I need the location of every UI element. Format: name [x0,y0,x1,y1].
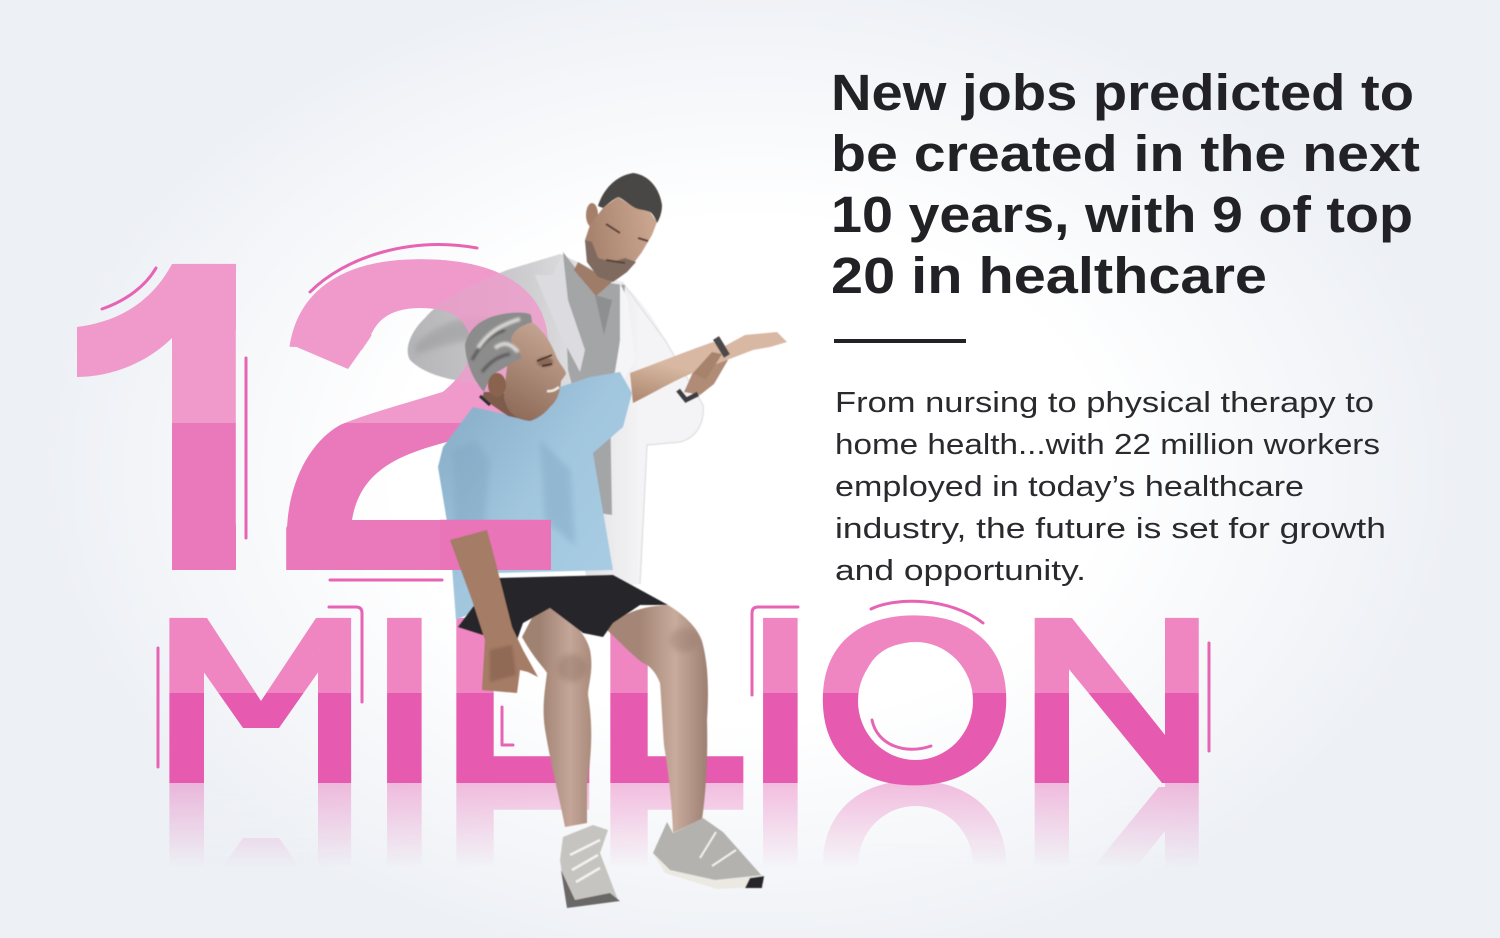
shoe body [560,825,618,907]
numeral 2 foot over shirt: 2 [267,167,576,665]
doctor: hand under arm [684,352,728,395]
doctor: beard [585,240,636,282]
patient: shirt shading [452,440,575,545]
divider under heading [834,339,966,343]
patient: eye shadow [537,357,553,367]
doctor: face [585,197,657,282]
patient torso [438,313,632,620]
big numerals: 12 [77,259,504,570]
patient: hair [465,313,532,392]
patient: near knee shading [557,654,587,682]
patient: raised arm and hand [630,332,787,403]
numeral 2 diagonal body [287,335,490,570]
doctor: eyes and mouth [606,224,648,263]
numeral 2 terminal cut [348,330,392,372]
patient: far leg [605,605,708,833]
body text: From nursing to physical therapy to [835,387,1374,419]
doctor: polo placket [595,295,612,335]
body text: employed in today’s healthcare [835,471,1304,503]
heading: 20 in healthcare [831,247,1267,304]
patient: hair highlights [478,319,520,352]
heading: 10 years, with 9 of top [831,186,1413,243]
shoe laces [570,840,600,882]
shoe laces [700,832,736,866]
patient: hand knuckle shading [490,645,516,682]
doctor: coat sleeve shading [415,317,490,355]
shoe sole [653,853,763,889]
numeral 2 tint over doctor's sleeve: 2 [267,167,576,665]
shoe shading [561,870,620,908]
shoe body [653,818,763,888]
doctor: hair [598,173,662,223]
patient: face [504,322,566,421]
doctor: watch [678,390,698,400]
numeral 1 flag [77,264,236,377]
patient: hair dark strands [472,330,510,372]
doctor [408,173,728,590]
numeral 2 counter [352,430,490,520]
patient: black shorts [458,575,668,640]
body text [835,387,1386,587]
patient: brow and eye [537,355,552,366]
patient: ear [488,373,506,397]
accent strokes around the numerals and word [102,245,1209,767]
patient: neck [482,392,530,421]
main artwork layer [77,73,1420,909]
patient: near leg [522,606,591,827]
heading [831,64,1420,304]
doctor: neck [574,262,612,296]
heading: New jobs predicted to [831,64,1414,121]
heading: be created in the next [831,125,1420,182]
patient: far knee shading [670,628,698,652]
patient: sleeve hem [450,530,489,540]
patient: smile [547,387,559,391]
patient: near shoe [560,825,620,908]
body text: industry, the future is set for growth [835,513,1386,545]
doctor: polo shirt [563,252,625,515]
patient: collar shadow [480,396,490,405]
doctor: ear [586,203,598,227]
shoe toe [745,876,764,888]
patient: wristband [716,338,727,356]
doctor: white coat body [408,254,703,590]
body text: and opportunity. [835,555,1086,587]
numeral 2: 2 [267,167,576,665]
big word: MILLION with mirrored reflection [152,600,1218,857]
doctor: coat lapels [535,254,585,372]
patient: lowered arm and hand [450,530,538,693]
doctor: coat edge shading [622,282,703,584]
numeral 1 stem: 1 [61,168,323,665]
patient limbs [450,332,787,833]
doctor: fingers over patient's arm [693,352,722,380]
body text: home health...with 22 million workers [835,429,1380,461]
patient: blue t-shirt [438,372,632,620]
patient: far shoe [653,818,764,889]
